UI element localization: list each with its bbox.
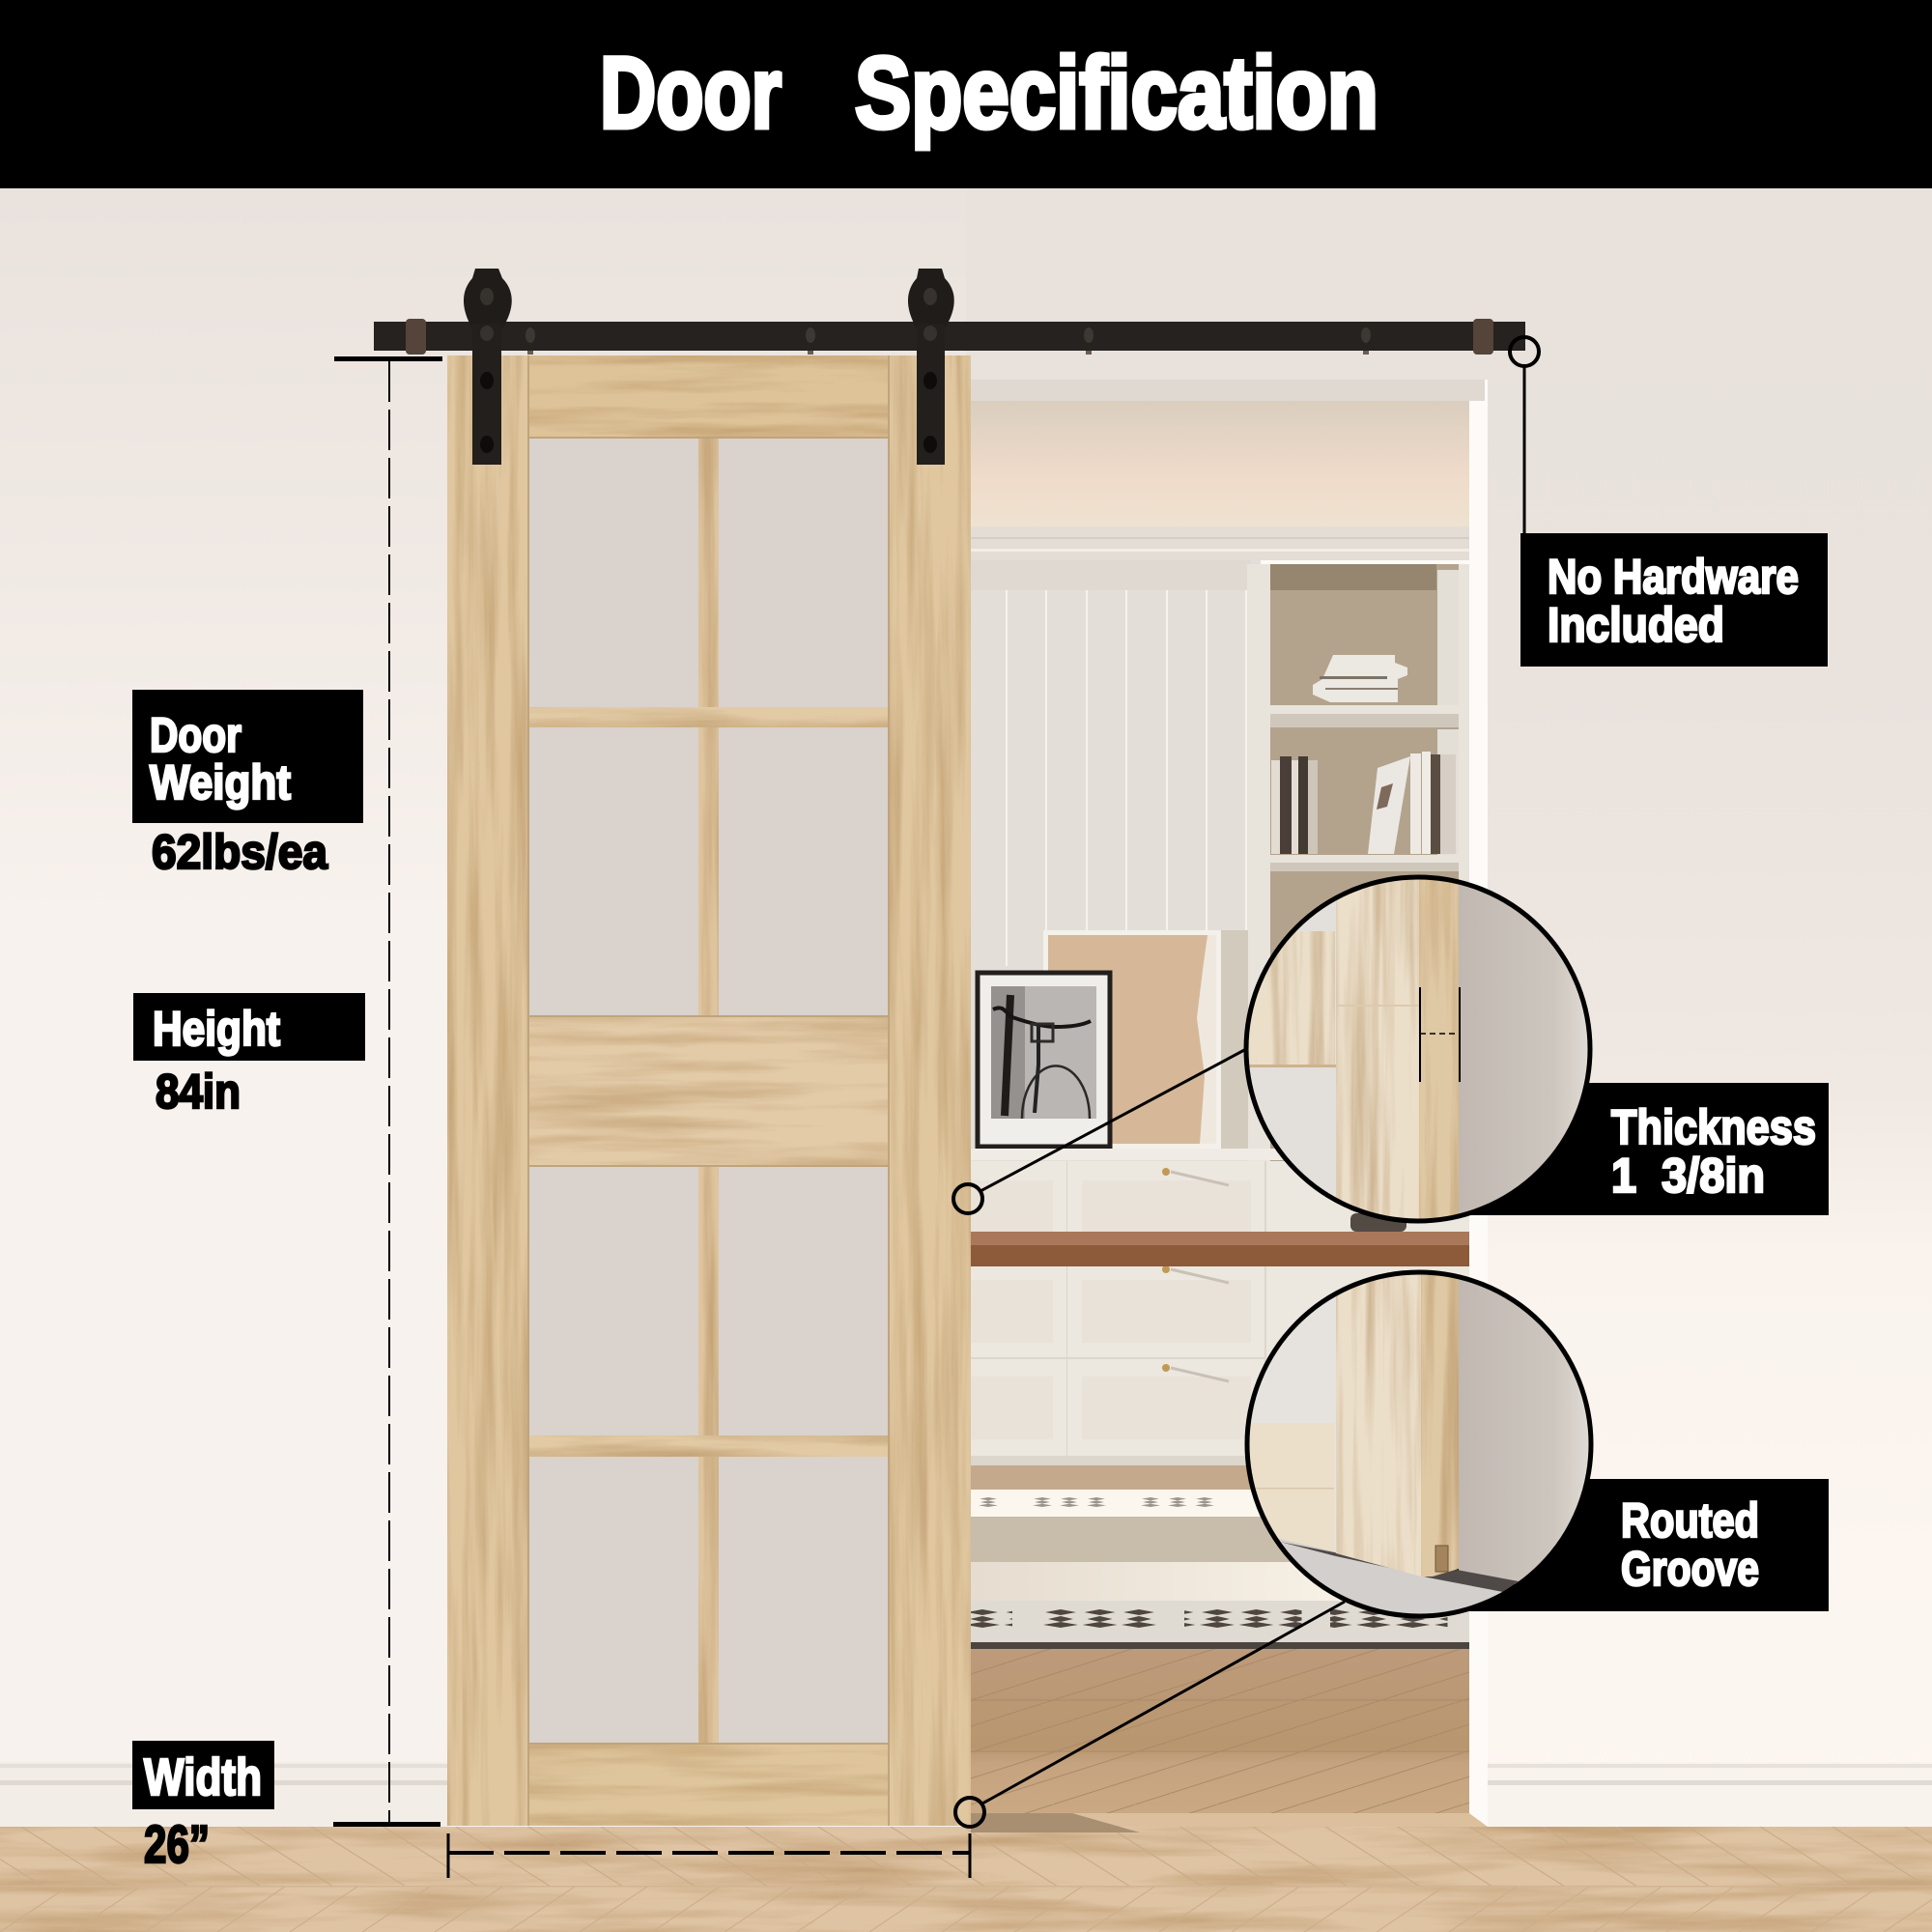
callout: no hardware included	[1510, 337, 1828, 667]
callout: no hardware included: Included	[1548, 598, 1724, 652]
doorway opening with room interior	[971, 380, 1488, 1833]
detail circle: door thickness	[1244, 875, 1594, 1223]
lock rail	[528, 1016, 889, 1166]
thickness marks	[1420, 987, 1460, 1082]
top rail	[528, 355, 889, 438]
spec: width	[132, 1741, 274, 1874]
door glass panes	[528, 438, 889, 1744]
callout label: thickness	[1418, 1083, 1829, 1215]
left hanger strap	[464, 269, 512, 465]
callout label: routed groove: Routed	[1621, 1493, 1759, 1548]
sliding barn door	[447, 355, 971, 1826]
leader line to thickness detail	[953, 1049, 1246, 1213]
barn door track	[374, 319, 1525, 355]
spec: height	[133, 993, 365, 1119]
title banner: Door	[600, 37, 781, 150]
books	[1271, 655, 1456, 854]
room rug and floor	[971, 1456, 1488, 1833]
title banner	[0, 0, 1932, 188]
callout label: routed groove: Groove	[1621, 1542, 1759, 1596]
paneled wall	[971, 560, 1261, 1164]
title banner: Specification	[855, 37, 1378, 150]
glass muntins	[528, 438, 889, 1744]
crown moulding	[971, 526, 1469, 560]
spec: door weight: Weight	[150, 755, 291, 810]
right hanger strap	[908, 269, 954, 465]
spec: door weight: Door	[150, 708, 242, 762]
spec: height: Height	[153, 1002, 280, 1056]
callout label: thickness: Thickness	[1611, 1100, 1816, 1154]
framed bicycle photo	[978, 973, 1110, 1147]
spec: door weight: 62lbs/ea	[152, 825, 328, 879]
callout: no hardware included: No Hardware	[1548, 550, 1799, 604]
callout label: thickness: 1 3/8in	[1611, 1149, 1765, 1203]
wooden counter	[971, 1213, 1469, 1266]
callout label: routed groove	[1418, 1479, 1829, 1611]
right stile	[890, 355, 971, 1826]
spec: width: 26”	[144, 1814, 210, 1874]
spec: width: Width	[144, 1748, 262, 1806]
leaning art print	[1043, 930, 1248, 1149]
cabinets and drawers	[971, 1149, 1469, 1464]
spec: height: 84in	[156, 1065, 241, 1119]
height dimension line	[333, 356, 442, 1827]
bookcase	[1247, 564, 1469, 1163]
spec: door weight	[132, 690, 363, 879]
width dimension line	[448, 1833, 970, 1878]
bottom rail	[528, 1744, 889, 1826]
baseboard	[0, 1762, 1932, 1827]
leader line to groove detail	[955, 1602, 1345, 1827]
detail circle: routed groove	[1245, 1270, 1594, 1623]
herringbone floor	[0, 1827, 1932, 1932]
left stile	[447, 355, 528, 1826]
